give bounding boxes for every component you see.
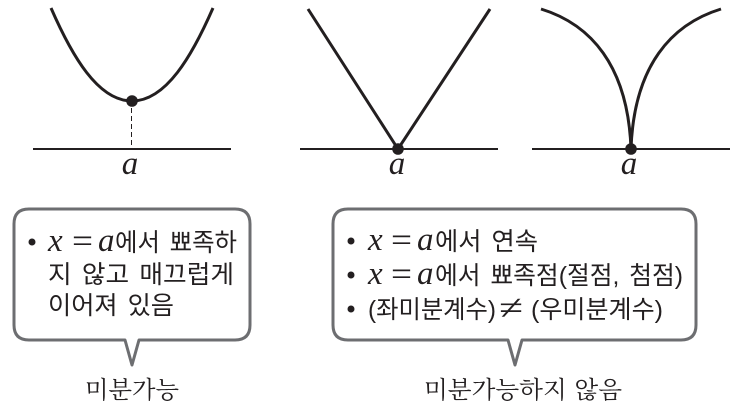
point on curve [126, 95, 138, 107]
axis line [300, 148, 498, 150]
axis line [532, 148, 730, 150]
right derivative text: (우미분계수) [531, 296, 663, 324]
variable a: a [417, 256, 434, 292]
cusp curve [541, 9, 721, 149]
caption: differentiable: 미분가능 [85, 370, 179, 405]
callout: differentiable conditions [14, 209, 250, 365]
V curve [308, 9, 490, 149]
equals sign: = [391, 222, 412, 259]
caption: not differentiable: 미분가능하지 않음 [424, 370, 622, 405]
equation x: x [47, 223, 63, 259]
equals sign: = [72, 223, 93, 260]
not equal sign: ≠ [499, 290, 523, 327]
equals sign: = [391, 256, 412, 293]
axis label a: a [122, 146, 138, 182]
corner point [392, 143, 404, 155]
bullet [28, 238, 36, 246]
speech bubble [14, 209, 250, 365]
graph: V-shaped corner point [300, 9, 498, 182]
bullet 1 [348, 238, 354, 244]
graph: cusp point [532, 9, 730, 182]
line 1 text: 에서 연속 [435, 228, 538, 256]
line 2 text: 지 않고 매끄럽게 [48, 261, 234, 289]
line 1 text: 에서 뾰족하 [115, 229, 237, 257]
variable a: a [98, 223, 114, 259]
parabola curve [51, 8, 213, 101]
axis label a: a [389, 146, 405, 182]
equation x: x [367, 222, 383, 258]
equation x: x [367, 256, 383, 292]
callout: not differentiable conditions [333, 209, 696, 365]
bullet 3 [348, 306, 354, 312]
cusp point [625, 143, 637, 155]
dashed guide line [130, 108, 132, 149]
variable a: a [417, 222, 434, 258]
bullet 2 [348, 272, 354, 278]
axis label a: a [621, 146, 637, 182]
line 3 text: 이어져 있음 [48, 292, 174, 320]
axis line [33, 148, 231, 150]
left derivative text: (좌미분계수) [368, 296, 496, 324]
graph: smooth parabola, differentiable [33, 8, 231, 182]
line 2 text: 에서 뾰족점(절점, 첨점) [435, 262, 683, 290]
speech bubble [333, 209, 696, 365]
